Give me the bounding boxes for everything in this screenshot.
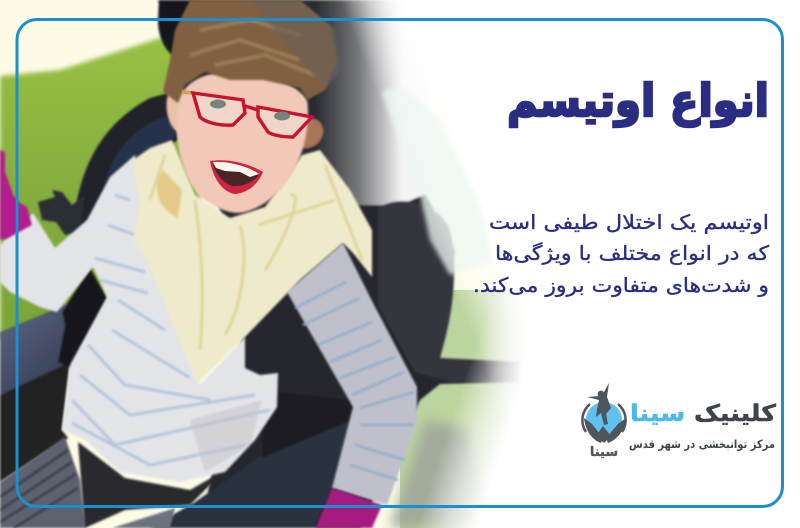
description text: [473, 210, 770, 297]
side cushion: [378, 201, 510, 382]
face: [177, 72, 308, 213]
line 1: اوتیسم یک اختلال طیفی است: [489, 210, 769, 234]
icon: hands and child: [582, 383, 626, 460]
eyes: [210, 100, 290, 120]
clinic logo: [582, 383, 777, 460]
hair: [163, 0, 340, 103]
right ear: [298, 118, 323, 148]
striped trousers: [0, 437, 225, 528]
backrest wing: [72, 92, 178, 240]
line 2: که در انواع مختلف با ویژگی‌ها: [495, 241, 770, 265]
gap under left arm: [58, 268, 107, 368]
left ear: [167, 90, 182, 133]
yellow scarf: [133, 140, 372, 384]
headrest: [158, 0, 198, 55]
pale wheel at lower right: [390, 420, 490, 528]
waist belt: [78, 442, 225, 528]
clinic name: کلینیک سینا: [630, 401, 777, 427]
head shadow fading to white: [300, 0, 430, 205]
wheelchair dark mass behind the child: [0, 0, 520, 528]
striped shirt torso and left sleeve: [0, 155, 278, 482]
sky and lawn background: [0, 0, 540, 528]
left hand pink glove: [0, 150, 32, 240]
clinic subtitle: مرکز توانبخشی در شهر قدس: [629, 437, 775, 452]
navy seat bottom right: [150, 415, 352, 528]
right sleeve: [287, 243, 417, 505]
right hand pink glove: [316, 488, 382, 528]
pale cushion overlay: [382, 85, 492, 275]
seat clip: [38, 190, 85, 235]
icon: hands and child: سینا: [590, 445, 618, 460]
navy armrest: [0, 305, 100, 395]
title: انواع اوتیسم: [507, 74, 769, 127]
line 3: و شدت‌های متفاوت بروز می‌کند.: [473, 273, 769, 297]
smiling mouth: [210, 160, 263, 194]
red glasses: [182, 92, 312, 137]
